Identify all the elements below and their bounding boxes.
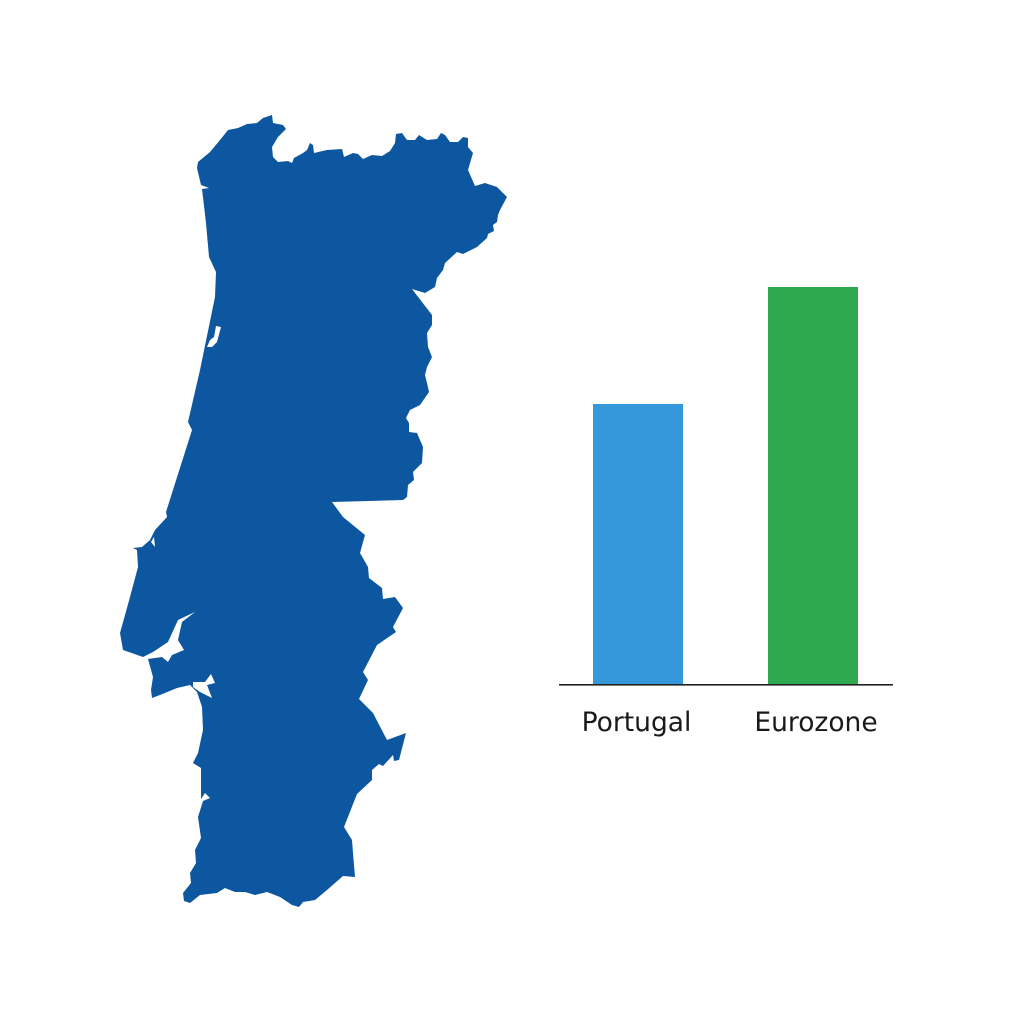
Mondego notch (151, 537, 155, 547)
bar: Eurozone (768, 287, 858, 685)
label: Eurozone: Eurozone (754, 707, 878, 738)
axis line (559, 684, 893, 686)
bar chart (559, 287, 893, 738)
Sado estuary (193, 674, 215, 698)
map of Portugal (120, 115, 507, 907)
label: Portugal: Portugal (582, 707, 691, 738)
bar: Portugal (593, 404, 683, 685)
Aveiro lagoon (207, 326, 221, 347)
